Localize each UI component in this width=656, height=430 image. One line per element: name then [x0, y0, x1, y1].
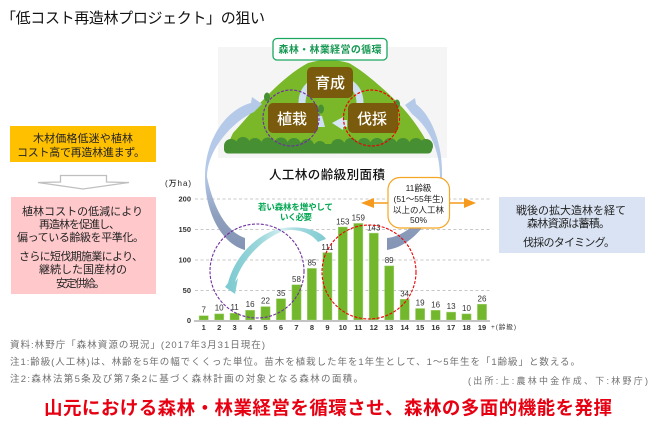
x axis labels: 3	[233, 323, 237, 332]
x axis labels: 8	[310, 323, 314, 332]
source: (出所:上:農林中金作成、下:林野庁)	[468, 375, 648, 386]
x axis labels: 4	[248, 323, 253, 332]
panel: problem statement: コスト高で再造林進まず。	[17, 145, 145, 159]
x axis labels: 9	[325, 323, 329, 332]
arrow: shift towards young forest	[225, 227, 326, 294]
annotation: need more young forest: いく必要	[280, 212, 312, 222]
panel: measures: 継続した国産材の	[39, 262, 127, 276]
x axis labels: 2	[217, 323, 221, 332]
circle: young forest	[210, 224, 304, 318]
bars	[199, 223, 487, 320]
label: forest management cycle: 森林・林業経営の循環	[278, 43, 382, 56]
title: 「低コスト再造林プロジェクト」の狙い	[1, 10, 265, 27]
value labels: 16	[246, 300, 255, 309]
box: harvesting: 伐採	[357, 111, 387, 128]
y axis labels: 50	[183, 286, 191, 295]
box: nurture	[307, 67, 353, 98]
panel: measures: 偏っている齢級を平準化。	[17, 230, 144, 244]
x axis labels: 14	[401, 323, 410, 332]
x axis labels: 12	[370, 323, 378, 332]
illustration: forest cycle mountain	[218, 47, 447, 158]
box: nurture: 育成	[315, 75, 345, 92]
bar chart: plantation area by age class	[165, 179, 516, 332]
value labels: 19	[416, 298, 425, 308]
value labels: 10	[462, 304, 471, 313]
value labels: 26	[478, 294, 487, 304]
value labels: 11	[230, 303, 239, 312]
panel: problem statement	[10, 126, 156, 162]
notes: 注2:森林法第5条及び第7条2に基づく森林計画の対象となる森林の面積。	[10, 373, 363, 385]
value labels: 22	[261, 296, 270, 306]
y axis labels: 200	[178, 194, 191, 204]
value labels: 58	[292, 275, 301, 284]
panel: timing: 戦後の拡大造林を経て	[516, 203, 626, 217]
y axis labels: 0	[187, 316, 191, 325]
value labels: 13	[447, 302, 456, 311]
callout: age class 11 and above: (51〜55年生)	[394, 194, 444, 204]
panel: measures: 安定供給。	[56, 276, 105, 290]
value labels: 16	[431, 300, 441, 310]
annotation: need more young forest: 若い森林を増やして	[258, 202, 333, 212]
annotation: need more young forest	[258, 202, 333, 222]
panel: problem statement: 木材価格低迷や植林	[33, 131, 133, 145]
callout: age class 11 and above: 50%	[410, 215, 427, 225]
y axis labels: 100	[178, 256, 191, 264]
panel: timing: 森林資源は蓄積。	[527, 216, 610, 230]
x axis labels: 6	[279, 323, 283, 332]
panel: timing: 伐採のタイミング。	[523, 235, 615, 249]
arrow: mature forest to harvesting	[387, 98, 442, 250]
chart heading: 人工林の齢級別面積	[269, 167, 385, 182]
notes: 注1:齢級(人工林)は、林齢を5年の幅でくくった単位。苗木を植栽した年を1年生として、1〜5年生を「1齢級」と数える。	[10, 356, 580, 368]
circle: mature forest	[322, 225, 416, 319]
value labels: 89	[385, 256, 394, 265]
y axis labels	[178, 194, 191, 325]
x axis labels: 10	[339, 323, 347, 332]
x axis labels: 16	[431, 323, 440, 332]
conclusion: 山元における森林・林業経営を循環させ、森林の多面的機能を発揮	[44, 398, 612, 418]
circle: harvesting highlight	[344, 90, 400, 146]
box: planting	[268, 103, 318, 133]
callout: age class 11 and above: 以上の人工林	[393, 205, 444, 215]
panel: measures: 植林コストの低減により	[22, 204, 143, 218]
x axis labels: 18	[462, 323, 471, 332]
value labels: 159	[352, 214, 366, 222]
panel: timing	[499, 197, 645, 253]
circle: planting highlight	[263, 90, 319, 146]
x axis labels	[202, 323, 486, 332]
value labels: 7	[201, 306, 206, 314]
x axis labels: 1	[202, 323, 206, 332]
box: harvesting	[348, 103, 398, 133]
value labels: 143	[367, 224, 381, 232]
arrow: planting to young forest	[205, 97, 262, 250]
x axis labels: 17	[447, 323, 455, 332]
label: forest management cycle	[273, 38, 387, 60]
box: planting: 植栽	[277, 111, 307, 128]
value labels: 35	[277, 289, 286, 298]
x axis labels: 5	[263, 323, 268, 332]
axis unit: (万ha)	[165, 179, 191, 188]
value labels: 111	[321, 243, 334, 252]
panel: measures	[11, 197, 156, 294]
value labels: 85	[307, 258, 317, 268]
value labels: 10	[215, 304, 224, 312]
x axis labels: 13	[385, 323, 393, 332]
value labels: 34	[400, 290, 410, 298]
arrow: down block arrow	[38, 176, 129, 189]
x axis labels: 11	[354, 323, 362, 332]
value labels	[201, 214, 487, 314]
notes: 資料:林野庁「森林資源の現況」(2017年3月31日現在)	[10, 339, 265, 351]
value labels: 153	[336, 218, 350, 226]
callout: age class 11 and above: 11齢級	[406, 183, 432, 193]
x axis unit: +(齢級)	[491, 322, 516, 331]
x axis labels: 7	[294, 323, 299, 332]
x axis labels: 19	[478, 323, 486, 332]
callout: age class 11 and above	[361, 178, 476, 228]
y axis labels: 150	[178, 225, 191, 234]
notes	[10, 339, 648, 386]
panel: measures: 再造林を促進し、	[39, 217, 120, 231]
x axis labels: 15	[416, 323, 424, 332]
panel: measures: さらに短伐期施業により、	[19, 250, 143, 263]
